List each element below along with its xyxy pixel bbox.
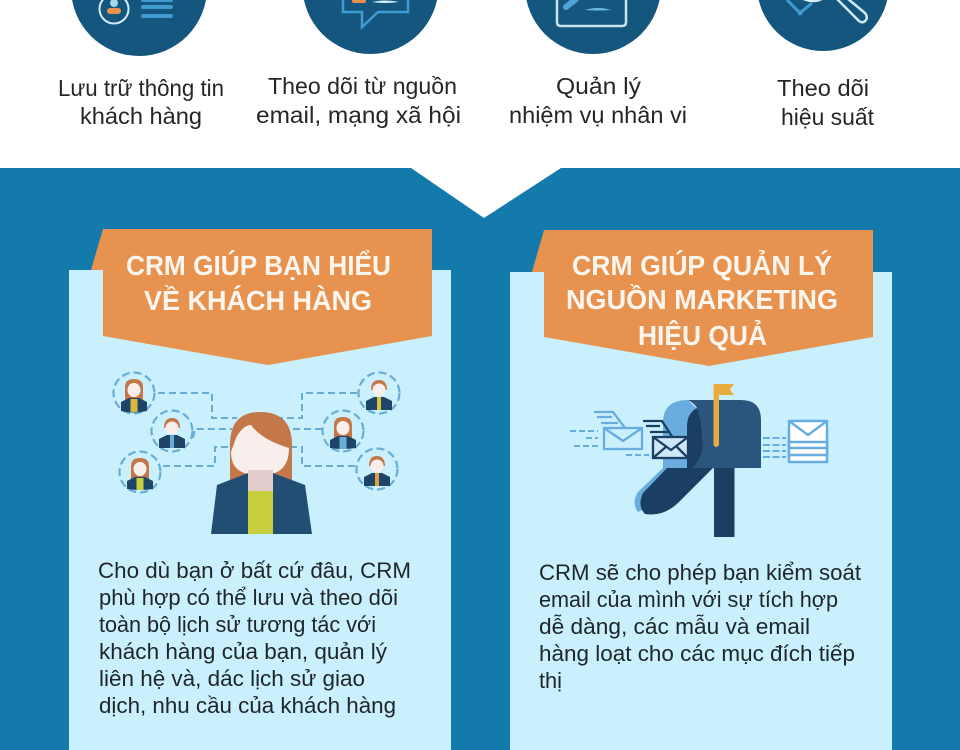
label: email and social networks: email, mạng xã hội	[256, 102, 461, 128]
small person: man upper middle left	[152, 410, 192, 452]
envelope stack	[789, 421, 827, 462]
icon: speech bubble	[302, 0, 438, 54]
heading: understand customers: VỀ KHÁCH HÀNG	[144, 285, 372, 316]
panel: understand customers	[69, 229, 451, 750]
small person: man lower right	[356, 448, 398, 490]
label: performance	[777, 75, 875, 130]
illustration: customer network	[114, 372, 400, 534]
blue notched background panel	[0, 168, 960, 750]
label: email and social networks	[256, 73, 461, 128]
mailbox post	[714, 465, 734, 537]
body text: manage marketing: thị	[539, 668, 562, 693]
label: staff tasks	[509, 73, 687, 128]
feature 3: staff task management	[509, 0, 687, 128]
body text: understand customers: Cho dù bạn ở bất cứ đâu, CRM	[98, 558, 411, 583]
icon: task board	[525, 0, 661, 54]
body text: manage marketing: dễ dàng, các mẫu và email	[539, 614, 810, 639]
body text: understand customers: dịch, nhu cầu của khách hàng	[99, 693, 396, 718]
heading: manage marketing: CRM GIÚP QUẢN LÝ	[572, 249, 832, 281]
small person: woman lower left	[120, 452, 160, 492]
envelope: dark entering box	[643, 421, 688, 458]
body text: understand customers: khách hàng của bạn, quản lý	[99, 639, 387, 664]
light panel background	[69, 270, 451, 750]
body text: manage marketing: hàng loạt cho các mục đích tiếp	[539, 641, 855, 666]
light panel background	[510, 272, 892, 750]
label: customer information: Lưu trữ thông tin	[58, 75, 224, 101]
main person: woman	[211, 412, 312, 534]
panel: manage marketing	[510, 230, 892, 750]
label: customer information	[58, 75, 224, 129]
small person: woman top left	[114, 372, 154, 414]
ribbon: heading background	[532, 230, 873, 366]
small person: woman middle right	[322, 410, 364, 452]
mailbox body	[688, 400, 761, 468]
speed lines: light envelope	[570, 431, 649, 455]
label: performance: Theo dõi	[777, 75, 869, 101]
envelope: light flying	[594, 412, 642, 449]
ribbon: heading background	[91, 229, 432, 365]
body text: manage marketing	[539, 560, 861, 693]
flag	[714, 384, 734, 447]
illustration: mailbox	[570, 384, 827, 537]
heading: manage marketing: HIỆU QUẢ	[638, 319, 767, 351]
small person: man top right	[358, 372, 400, 414]
mailbox interior	[640, 408, 713, 515]
speed lines: envelope stack	[763, 438, 786, 457]
feature 1: customer information storage	[58, 0, 224, 129]
body text: manage marketing: email của mình với sự tích hợp	[539, 587, 838, 612]
body text: understand customers: liên hệ và, dác lịch sử giao	[99, 666, 365, 691]
body text: understand customers: phù hợp có thể lưu và theo dõi	[99, 585, 398, 610]
body text: manage marketing: CRM sẽ cho phép bạn kiểm soát	[539, 560, 861, 585]
heading: manage marketing	[566, 249, 838, 351]
dashed connectors	[158, 393, 357, 466]
icon: customer profile	[71, 0, 207, 56]
body text: understand customers: toàn bộ lịch sử tương tác với	[99, 612, 376, 637]
label: staff tasks: nhiệm vụ nhân vi	[509, 102, 687, 128]
label: email and social networks: Theo dõi từ nguồn	[268, 73, 457, 99]
heading: understand customers	[126, 250, 391, 316]
heading: manage marketing: NGUỒN MARKETING	[566, 284, 838, 315]
icon: magnifier	[757, 0, 889, 51]
body text: understand customers	[98, 558, 411, 718]
label: performance: hiệu suất	[781, 104, 875, 130]
feature 2: email and social tracking	[256, 0, 461, 128]
heading: understand customers: CRM GIÚP BẠN HIỂU	[126, 250, 391, 281]
label: staff tasks: Quản lý	[556, 73, 642, 99]
feature 4: performance tracking	[757, 0, 889, 130]
label: customer information: khách hàng	[80, 103, 202, 129]
mailbox door	[634, 400, 698, 512]
